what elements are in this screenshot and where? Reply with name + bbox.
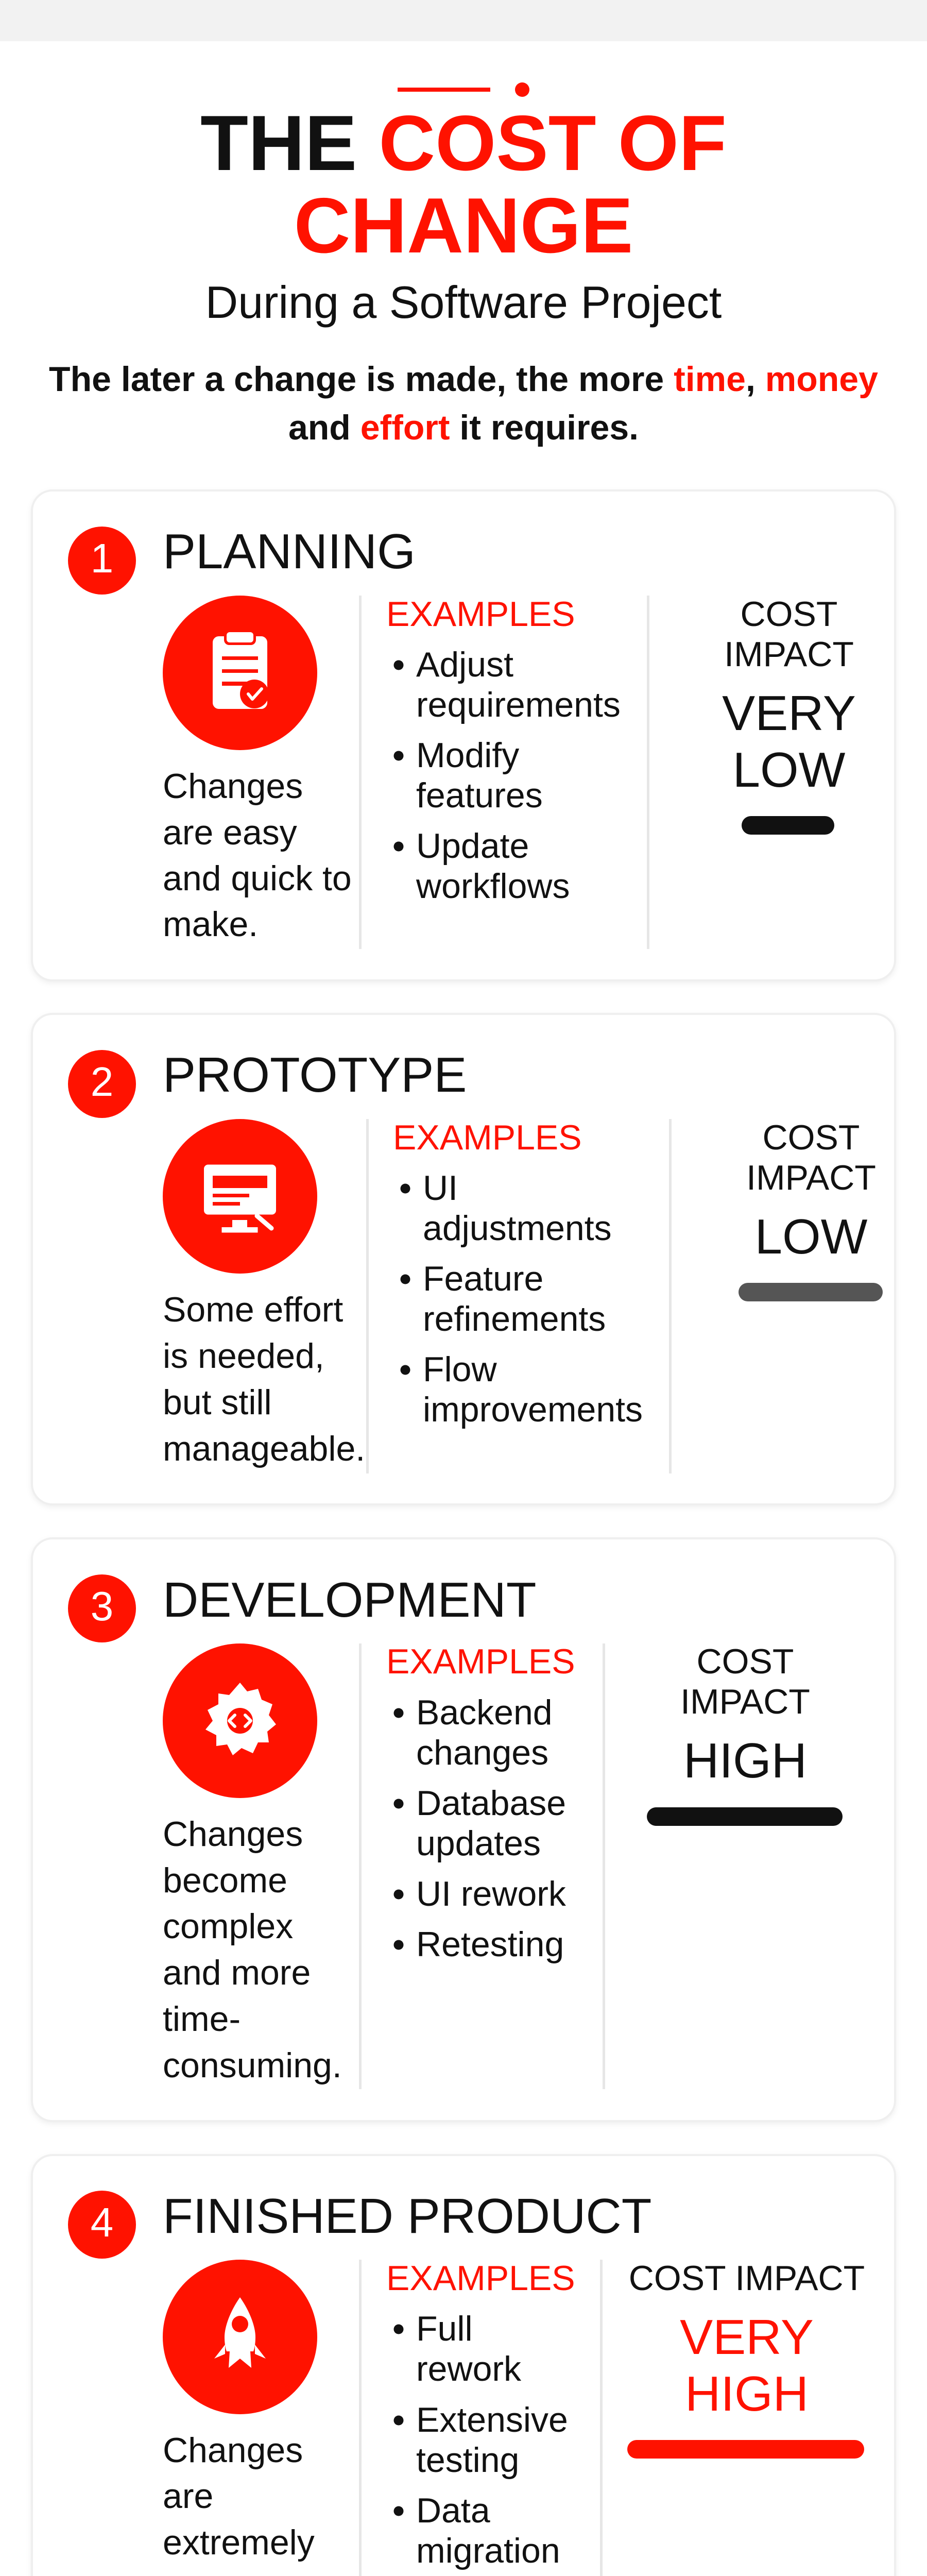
cost impact: very low: VERY	[722, 686, 856, 741]
examples list: EXAMPLES	[386, 2259, 575, 2298]
examples list	[386, 1642, 575, 1964]
description: and quick to	[163, 859, 352, 898]
heading: development: DEVELOPMENT	[163, 1572, 536, 1628]
description: time-	[163, 1999, 241, 2039]
examples list: Retesting	[416, 1925, 564, 1964]
step number 2	[68, 1050, 136, 1118]
examples list: testing	[416, 2441, 519, 2480]
description	[163, 1290, 365, 1468]
cost impact: high	[647, 1642, 843, 1826]
description: are	[163, 2477, 213, 2516]
description: Changes	[163, 2431, 303, 2470]
heading: prototype: PROTOTYPE	[163, 1047, 467, 1103]
step number 4: 4	[91, 2199, 113, 2245]
cost impact: high: HIGH	[683, 1733, 807, 1788]
examples list: EXAMPLES	[393, 1118, 582, 1157]
icon: presentation board	[163, 1119, 317, 1274]
title: THE COST OF	[200, 99, 727, 187]
panel: finished product	[32, 2155, 895, 2576]
decorative title accent	[398, 82, 529, 97]
examples list: migration	[416, 2531, 560, 2570]
examples list: Update	[416, 826, 529, 866]
examples list: features	[416, 776, 543, 815]
examples list: UI rework	[416, 1874, 566, 1913]
description: but still	[163, 1383, 272, 1422]
step number 3	[68, 1574, 136, 1642]
examples list: Modify	[416, 736, 519, 775]
step number 3: 3	[91, 1583, 113, 1629]
heading: finished product: FINISHED PRODUCT	[163, 2189, 651, 2244]
panel: development	[32, 1538, 895, 2121]
cost impact: very low: LOW	[733, 742, 846, 798]
step number 4	[68, 2191, 136, 2259]
examples list: Full	[416, 2309, 473, 2348]
step number 1	[68, 527, 136, 595]
cost impact: very high	[627, 2259, 865, 2459]
examples list: Data	[416, 2491, 490, 2530]
heading: planning: PLANNING	[163, 524, 416, 579]
examples list: refinements	[423, 1299, 606, 1338]
examples list: Backend	[416, 1693, 553, 1732]
examples list	[393, 1118, 643, 1429]
cost impact: very low: COST	[741, 595, 837, 634]
title	[200, 99, 727, 269]
cost impact: high: IMPACT	[680, 1682, 810, 1721]
title: CHANGE	[294, 182, 633, 269]
examples list: EXAMPLES	[386, 1642, 575, 1681]
panel: planning	[32, 490, 895, 980]
examples list: rework	[416, 2349, 522, 2388]
examples list: requirements	[416, 685, 621, 724]
header	[49, 82, 878, 447]
cost impact: very low: IMPACT	[724, 635, 854, 674]
cost impact: very high: COST IMPACT	[629, 2259, 865, 2298]
examples list: changes	[416, 1733, 548, 1772]
examples list: updates	[416, 1824, 541, 1863]
cost impact: very high: HIGH	[685, 2366, 809, 2421]
description: and more	[163, 1953, 311, 1992]
intro text	[49, 360, 878, 447]
description	[163, 1815, 342, 2085]
cost impact: low: LOW	[755, 1209, 868, 1264]
intro text: The later a change is made, the more time, money	[49, 360, 878, 399]
panel: prototype	[32, 1014, 895, 1504]
examples list: EXAMPLES	[386, 595, 575, 634]
examples list	[386, 595, 621, 906]
examples list: Extensive	[416, 2400, 568, 2439]
examples list: adjustments	[423, 1209, 612, 1248]
description: extremely	[163, 2523, 315, 2562]
subtitle: During a Software Project	[205, 277, 722, 328]
description	[163, 767, 352, 944]
cost impact: very high: VERY	[680, 2310, 814, 2365]
description: is needed,	[163, 1336, 324, 1376]
icon: gear with code	[163, 1643, 317, 1798]
examples list: workflows	[416, 867, 570, 906]
step number 1: 1	[91, 535, 113, 581]
examples list: Feature	[423, 1259, 543, 1298]
examples list	[386, 2259, 575, 2576]
description: Some effort	[163, 1290, 343, 1329]
description: consuming.	[163, 2046, 342, 2085]
examples list: Adjust	[416, 645, 513, 684]
examples list: Flow	[423, 1350, 497, 1389]
examples list: improvements	[423, 1390, 643, 1429]
cost impact: high: COST	[697, 1642, 794, 1681]
description: complex	[163, 1907, 293, 1946]
description: manageable.	[163, 1429, 365, 1468]
cost impact: low	[739, 1118, 883, 1301]
examples list: UI	[423, 1168, 458, 1208]
cost impact: low: COST	[763, 1118, 860, 1157]
description	[163, 2431, 332, 2576]
intro text: and effort it requires.	[288, 408, 639, 447]
cost impact: very low	[722, 595, 856, 835]
icon: clipboard with check	[163, 596, 317, 750]
description: Changes	[163, 1815, 303, 1854]
description: Changes	[163, 767, 303, 806]
description: become	[163, 1861, 287, 1900]
cost impact: low: IMPACT	[746, 1158, 876, 1197]
icon: rocket	[163, 2260, 317, 2414]
step number 2: 2	[91, 1059, 113, 1105]
description: make.	[163, 905, 258, 944]
description: are easy	[163, 813, 297, 852]
examples list: Database	[416, 1784, 566, 1823]
